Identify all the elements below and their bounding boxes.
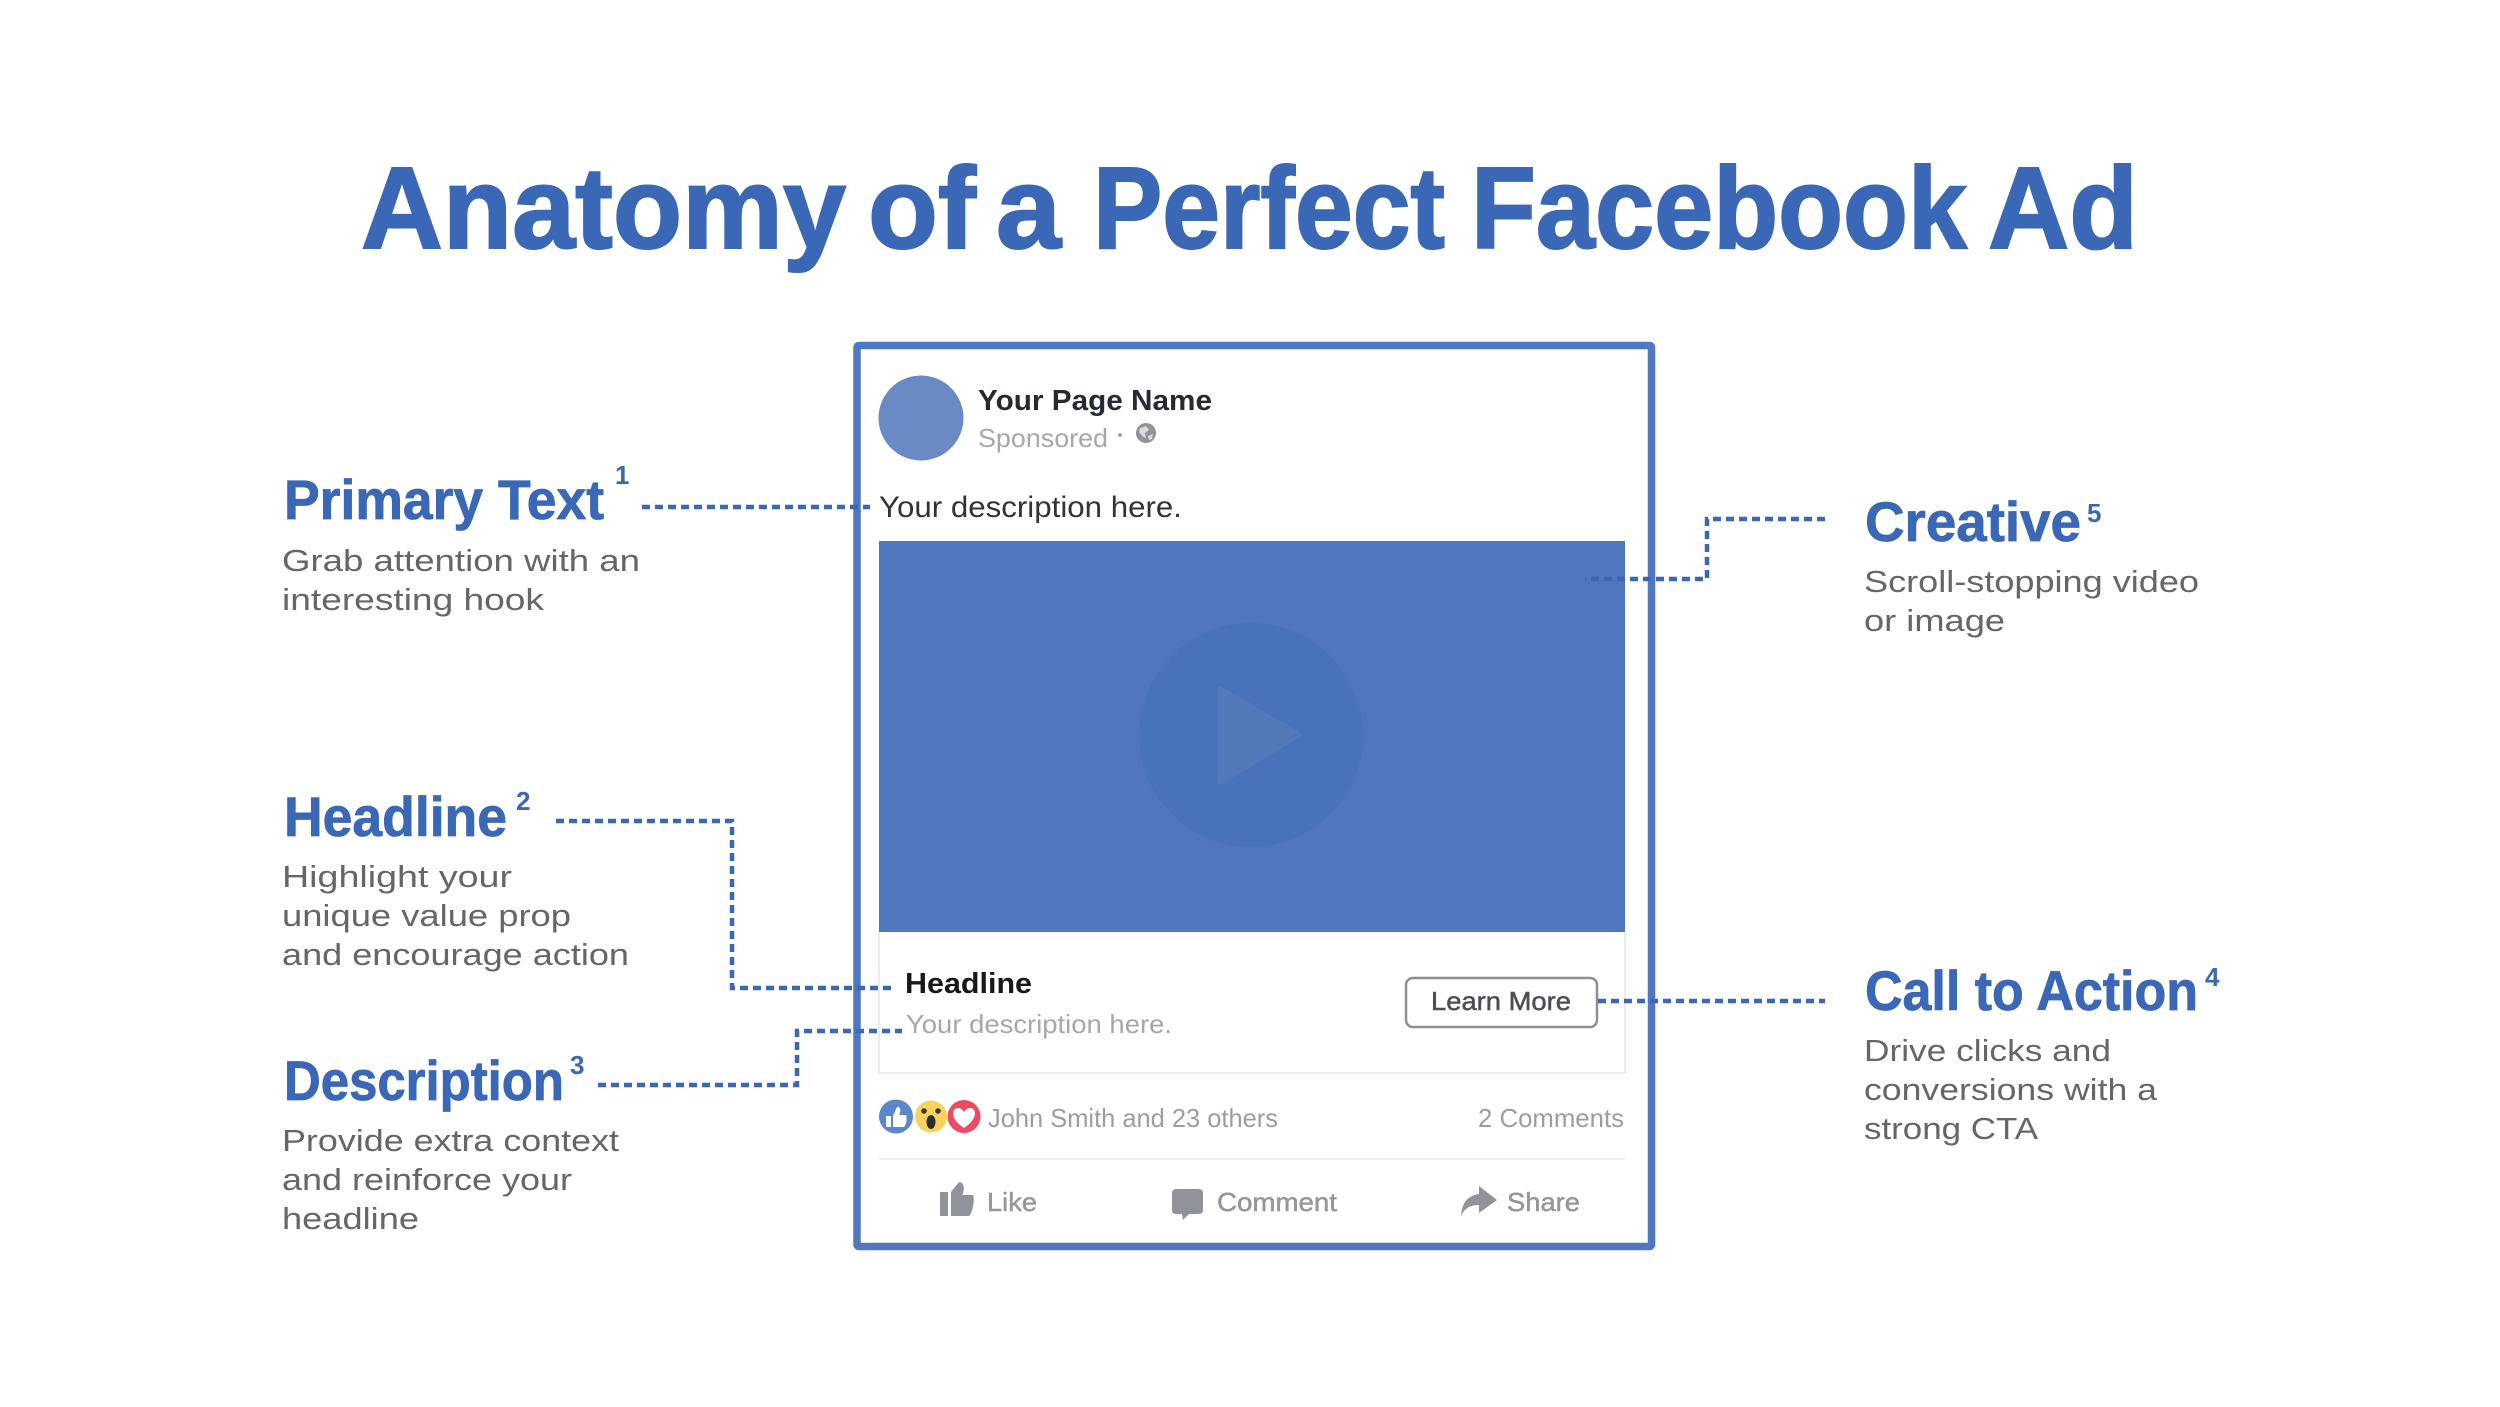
icon: share (1461, 1186, 1497, 1216)
heading: Call to Action (1865, 959, 2198, 1022)
comment count: 2 Comments (1478, 1103, 1624, 1133)
like label: Like (987, 1187, 1037, 1217)
heading: Headline (284, 785, 507, 848)
connector: call to action (1598, 999, 1825, 1003)
connector: description (598, 1031, 902, 1085)
description: strong CTA (1864, 1111, 2038, 1146)
link headline: Headline (905, 968, 1032, 1000)
description: and encourage action (282, 937, 629, 972)
link description: Your description here. (906, 1009, 1172, 1039)
link description box (879, 932, 1625, 1073)
description: Drive clicks and (1864, 1033, 2111, 1068)
description: Grab attention with an (282, 543, 640, 578)
reaction names: John Smith and 23 others (988, 1103, 1278, 1133)
callout: creative (1864, 490, 2199, 638)
title: Facebook (1471, 143, 1967, 273)
description: and reinforce your (282, 1162, 572, 1197)
learn more button (1406, 978, 1597, 1027)
description: interesting hook (282, 582, 545, 617)
card frame (857, 346, 1652, 1246)
play button (1139, 623, 1363, 847)
callout: primary text (282, 460, 640, 617)
title: of (868, 143, 976, 273)
creative video area (879, 541, 1625, 932)
connector: creative (1585, 519, 1825, 579)
avatar (878, 376, 964, 460)
divider (879, 1158, 1625, 1160)
footnote number 2: 2 (516, 786, 530, 816)
callout: description (282, 1049, 619, 1236)
description: Provide extra context (282, 1123, 619, 1158)
share label: Share (1507, 1187, 1580, 1217)
reactions (879, 1100, 1624, 1134)
footnote number 5: 5 (2087, 498, 2101, 528)
description: unique value prop (282, 898, 571, 933)
description: conversions with a (1864, 1072, 2158, 1107)
heading: Creative (1865, 490, 2081, 553)
title: a (996, 143, 1062, 273)
footnote number 4: 4 (2205, 962, 2220, 992)
title: Anatomy (361, 143, 846, 273)
heading: Description (284, 1049, 564, 1112)
page name: Your Page Name (978, 385, 1212, 417)
title: Perfect (1093, 143, 1445, 273)
connector: headline (556, 821, 895, 988)
panel: facebook ad mockup (857, 346, 1652, 1246)
icon: comment (1172, 1189, 1203, 1220)
description: Scroll-stopping video (1864, 564, 2199, 599)
description: Highlight your (282, 859, 512, 894)
icon: love reaction (948, 1100, 980, 1133)
icon: like reaction (879, 1100, 913, 1134)
description: headline (282, 1201, 419, 1236)
sponsored line: Sponsored (978, 423, 1108, 453)
callout: call to action (1864, 959, 2220, 1146)
icon: wow reaction (915, 1100, 947, 1132)
comment label: Comment (1217, 1187, 1338, 1217)
footnote number 3: 3 (570, 1050, 584, 1080)
callout: headline (282, 785, 629, 972)
primary text: Your description here. (879, 491, 1182, 524)
description: or image (1864, 603, 2005, 638)
action bar (940, 1182, 1580, 1220)
icon: like (940, 1182, 974, 1216)
heading: Primary Text (284, 468, 604, 531)
title: Ad (1988, 143, 2138, 273)
connector: primary text (642, 505, 870, 509)
footnote number 1: 1 (615, 460, 629, 490)
learn more button: Learn More (1431, 986, 1571, 1016)
